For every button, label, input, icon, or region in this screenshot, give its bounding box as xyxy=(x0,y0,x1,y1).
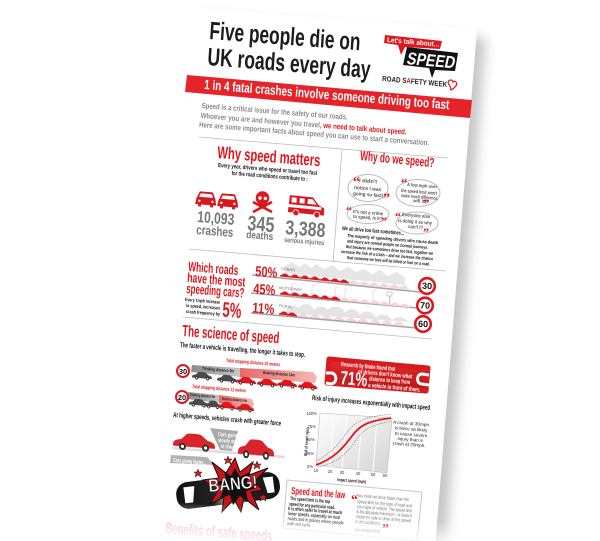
speech bubble 4: Everyone else xyxy=(402,212,430,220)
body text xyxy=(286,496,344,529)
sign: 60: 60 xyxy=(418,319,428,329)
speech bubble 2: will it? xyxy=(412,198,427,205)
speech bubble 2: the speed limit won't xyxy=(401,188,438,197)
chart note: is twice as likely xyxy=(395,425,428,433)
speech bubble 1 xyxy=(348,174,390,206)
chart: stopping distance at 20mph: Total stopping distance 12 metres xyxy=(192,384,246,394)
chart note: crash at 20mph. xyxy=(392,441,426,448)
quote: in all conditions. xyxy=(355,519,381,527)
intro text: Speed is a critical issue for the safety of our roads. xyxy=(201,101,348,122)
chart note: injury than a xyxy=(397,436,423,443)
intro text: Here are some important facts about speed you can use to start a conversation. xyxy=(199,120,429,147)
callout: 71 percent research: of drivers don't know what xyxy=(358,370,412,380)
chart: stopping distance at 20mph: 20 xyxy=(178,393,186,402)
tag: cars going faster: Cars going faster... xyxy=(173,458,206,467)
chart: stopping distance at 20mph: Braking distance 6m xyxy=(222,396,248,403)
body text: walk and cycle. xyxy=(286,521,312,529)
text: we all drive too fast: that someone we love will be killed or hurt on a road. xyxy=(347,255,430,267)
intro text xyxy=(199,101,429,147)
stat: serious injuries: 3,388 xyxy=(285,217,326,242)
chart: stopping distance at 30mph: 30 xyxy=(179,367,187,376)
illustration: slow cars stop in time: in time. xyxy=(221,444,235,451)
quote: You must not drive faster than the xyxy=(357,493,409,503)
logo: Let's talk about speed, Road Safety Week: Let's talk about... xyxy=(387,37,439,49)
chart: stopping distance at 30mph: Total stopping distance 23 metres xyxy=(226,358,280,368)
body text: speed for any particular road. xyxy=(289,502,336,511)
subheading: Every year, drivers who speed or travel too fast xyxy=(218,163,317,177)
stat: crashes xyxy=(196,208,235,240)
sheet xyxy=(160,8,477,541)
note: 5 percent crash frequency: 5% xyxy=(222,299,242,323)
quote: gov.uk/speed-limits xyxy=(355,527,381,535)
icon: left bracket xyxy=(326,373,336,384)
note: 5 percent crash frequency xyxy=(185,297,242,323)
title xyxy=(207,17,371,84)
sign: 30: 30 xyxy=(422,281,432,291)
chart: risk of injury curve: 40 xyxy=(356,471,361,476)
speech bubble 3: to speed, is it? xyxy=(353,214,382,222)
heading: Which roads xyxy=(188,259,239,278)
illustration: bang crash xyxy=(175,456,281,512)
speech bubble 1: going so fast! xyxy=(353,191,383,199)
heading: Why do we speed? xyxy=(360,148,435,170)
chart: risk of injury curve: 75% xyxy=(308,424,316,429)
body text: It is often safer to travel at much xyxy=(288,506,342,516)
row: motorway: MOTORWAY xyxy=(279,285,303,292)
text: we all drive too fast: We all drive too fast sometimes... xyxy=(342,226,405,237)
note: 5 percent crash frequency: in speed, increases xyxy=(186,303,221,312)
logo: Let's talk about speed, Road Safety Week: SPEED xyxy=(405,48,457,72)
row: rural xyxy=(251,301,417,328)
panel: why speed matters xyxy=(195,143,326,247)
chart note xyxy=(392,420,430,448)
chart: stopping distance at 30mph: Thinking distance 9m xyxy=(202,366,234,374)
chart note: to cause severe xyxy=(395,431,428,438)
row: urban xyxy=(252,262,420,292)
quote: is the absolute maximum – it doesn't xyxy=(356,509,413,520)
chart: risk of injury curve: 50% xyxy=(307,437,315,442)
speech bubble 1: “ xyxy=(353,175,360,190)
heading: Why speed matters xyxy=(217,143,321,170)
stat: crashes: crashes xyxy=(196,222,234,240)
bottom fade xyxy=(0,480,600,541)
speech bubble 3: It's not a crime xyxy=(353,209,383,217)
row: rural: 11% xyxy=(252,301,275,318)
speech bubble 1: notice I was xyxy=(354,185,381,193)
speech bubble 4: is doing it so why xyxy=(398,218,432,227)
speech bubble 2: A few mph over xyxy=(407,182,437,190)
body text: The speed limit is the top xyxy=(290,496,330,505)
panel: speed and the law xyxy=(283,480,422,541)
speech bubble 1: I didn't xyxy=(359,178,378,185)
illustration: slow cars stop in time: slowly stop xyxy=(218,438,240,446)
chart: risk of injury curve: 20 xyxy=(328,469,333,474)
chart note: A crash at 30mph xyxy=(393,420,430,427)
text: we all drive too fast: and injury are normal people on normal journeys. xyxy=(347,239,428,250)
heading xyxy=(186,259,246,301)
panel: why do we speed xyxy=(341,148,440,267)
text: we all drive too fast xyxy=(341,226,438,267)
subheading xyxy=(218,163,317,183)
heading: the science of speed: The science of speed xyxy=(182,322,280,347)
stat: deaths: 345 xyxy=(247,212,275,237)
sign: 60 xyxy=(415,316,431,332)
callout: 71 percent research: a vehicle in front of them. xyxy=(368,383,420,394)
chart: risk of injury curve: Impact speed (mph) xyxy=(337,477,367,484)
icon: ambulance xyxy=(288,195,325,219)
stat: deaths: deaths xyxy=(246,229,274,243)
text: we all drive too fast: increase the risk of a crash – and we increase the chance xyxy=(341,249,434,261)
row: urban: 50% xyxy=(255,264,278,282)
stat: deaths xyxy=(246,212,275,243)
speech bubble 3: ” xyxy=(381,214,387,228)
callout: 71 percent research: 71% xyxy=(340,368,368,391)
quote: your type of vehicle. The speed limit xyxy=(357,504,413,514)
title: Five people die on xyxy=(209,17,361,56)
speech bubble 2 xyxy=(396,175,440,211)
quote: mean it's safe to drive at this speed xyxy=(356,514,411,524)
icon: skull and crossbones xyxy=(253,191,272,212)
chart: risk of injury curve: Risk of severe injury xyxy=(303,426,310,456)
speech bubble 1: ” xyxy=(383,192,390,206)
row: motorway: 45% xyxy=(253,282,276,299)
callout: 71 percent research: distance to keep from xyxy=(369,377,410,386)
panel: which roads have the most speeding cars xyxy=(185,259,435,332)
heading: Speed and the law xyxy=(291,486,346,501)
chart: risk of injury curve: 25% xyxy=(306,451,314,456)
chart: risk of injury curve: 50 xyxy=(371,472,376,477)
chart: stopping distance at 20mph xyxy=(176,384,254,413)
logo: Let's talk about speed, Road Safety Week: ROAD SAFETY WEEK xyxy=(382,74,448,89)
speech bubble 4 xyxy=(395,209,438,239)
callout: 71 percent research: Research by Brake found that xyxy=(341,362,395,373)
quote: ” xyxy=(382,522,389,537)
speech bubble 2: “ xyxy=(401,175,408,190)
speech bubble 3 xyxy=(346,203,389,228)
speech bubble 2: ” xyxy=(423,196,430,211)
tag: cars going faster xyxy=(170,455,215,467)
subheading: for the road conditions contribute to : xyxy=(231,171,308,183)
quote xyxy=(351,493,413,537)
row: urban: URBAN xyxy=(281,266,295,272)
sign: 70: 70 xyxy=(420,300,430,311)
quote: speed limit for the type of road and xyxy=(357,499,412,509)
heading: speeding cars? xyxy=(186,281,245,301)
body text: lower speeds, especially on rural xyxy=(288,511,341,521)
quote: “ xyxy=(351,493,358,508)
speech bubble 4: “ xyxy=(395,209,401,223)
chart: stopping distance at 20mph: Thinking distance 6m xyxy=(190,392,216,399)
chart: risk of injury curve: 100% xyxy=(306,411,317,416)
speech bubble 3: “ xyxy=(346,203,352,217)
callout: 71 percent research xyxy=(326,359,429,394)
body text: roads and in places where people xyxy=(287,516,344,526)
icon: right bracket xyxy=(418,374,429,385)
title: UK roads every day xyxy=(207,43,371,84)
chart: stopping distance at 30mph: Braking distance 14m xyxy=(263,370,295,378)
chart: risk of injury curve: 0% xyxy=(307,464,313,469)
note: 5 percent crash frequency: crash frequency by xyxy=(186,309,221,318)
icon: crashed cars xyxy=(195,191,239,210)
chart: risk of injury curve: 60 xyxy=(383,473,388,478)
chart: risk of injury curve: 10 xyxy=(314,468,319,473)
sign: 70 xyxy=(417,298,433,313)
red headline band xyxy=(185,75,472,118)
speech bubble 4: ” xyxy=(423,225,429,239)
text: we all drive too fast: But because we sometimes drive too fast, together we xyxy=(346,244,434,256)
row: motorway xyxy=(251,282,418,308)
stat: serious injuries: serious injuries xyxy=(284,237,324,247)
row: rural: RURAL xyxy=(279,303,294,309)
infographic content xyxy=(165,17,472,541)
heading: have the most xyxy=(187,270,246,290)
text: we all drive too fast: The majority of speeding drivers who cause death xyxy=(347,233,438,245)
chart: stopping distance at 30mph xyxy=(177,358,317,391)
illustration: bang crash: BANG! xyxy=(208,472,258,496)
illustration: slow cars stop in time xyxy=(172,428,285,460)
stat: crashes: 10,093 xyxy=(197,208,235,229)
chart: risk of injury curve: 30 xyxy=(340,470,345,475)
sign: 30 xyxy=(419,278,435,294)
stopping distance text: The faster a vehicle is travelling, the longer it takes to stop. xyxy=(180,342,305,359)
chart: risk of injury curve xyxy=(303,411,392,484)
intro text: Whoever you are and however you travel, we need to talk about speed. xyxy=(200,111,407,136)
red headline band: 1 in 4 fatal crashes involve someone driving too fast xyxy=(204,77,450,112)
text: higher speeds: At higher speeds, vehicles crash with greater force xyxy=(173,412,281,428)
illustration: slow cars stop in time: Cars going xyxy=(218,432,239,440)
logo: Let's talk about speed, Road Safety Week xyxy=(382,35,458,90)
sheet shadow xyxy=(172,16,486,541)
note: 5 percent crash frequency: Every 1mph increase xyxy=(185,297,220,306)
speech bubble 2: make much difference, xyxy=(401,193,439,202)
chart heading: Risk of injury increases exponentially with impact speed xyxy=(312,395,430,412)
speech bubble 4: can't I? xyxy=(408,224,423,231)
